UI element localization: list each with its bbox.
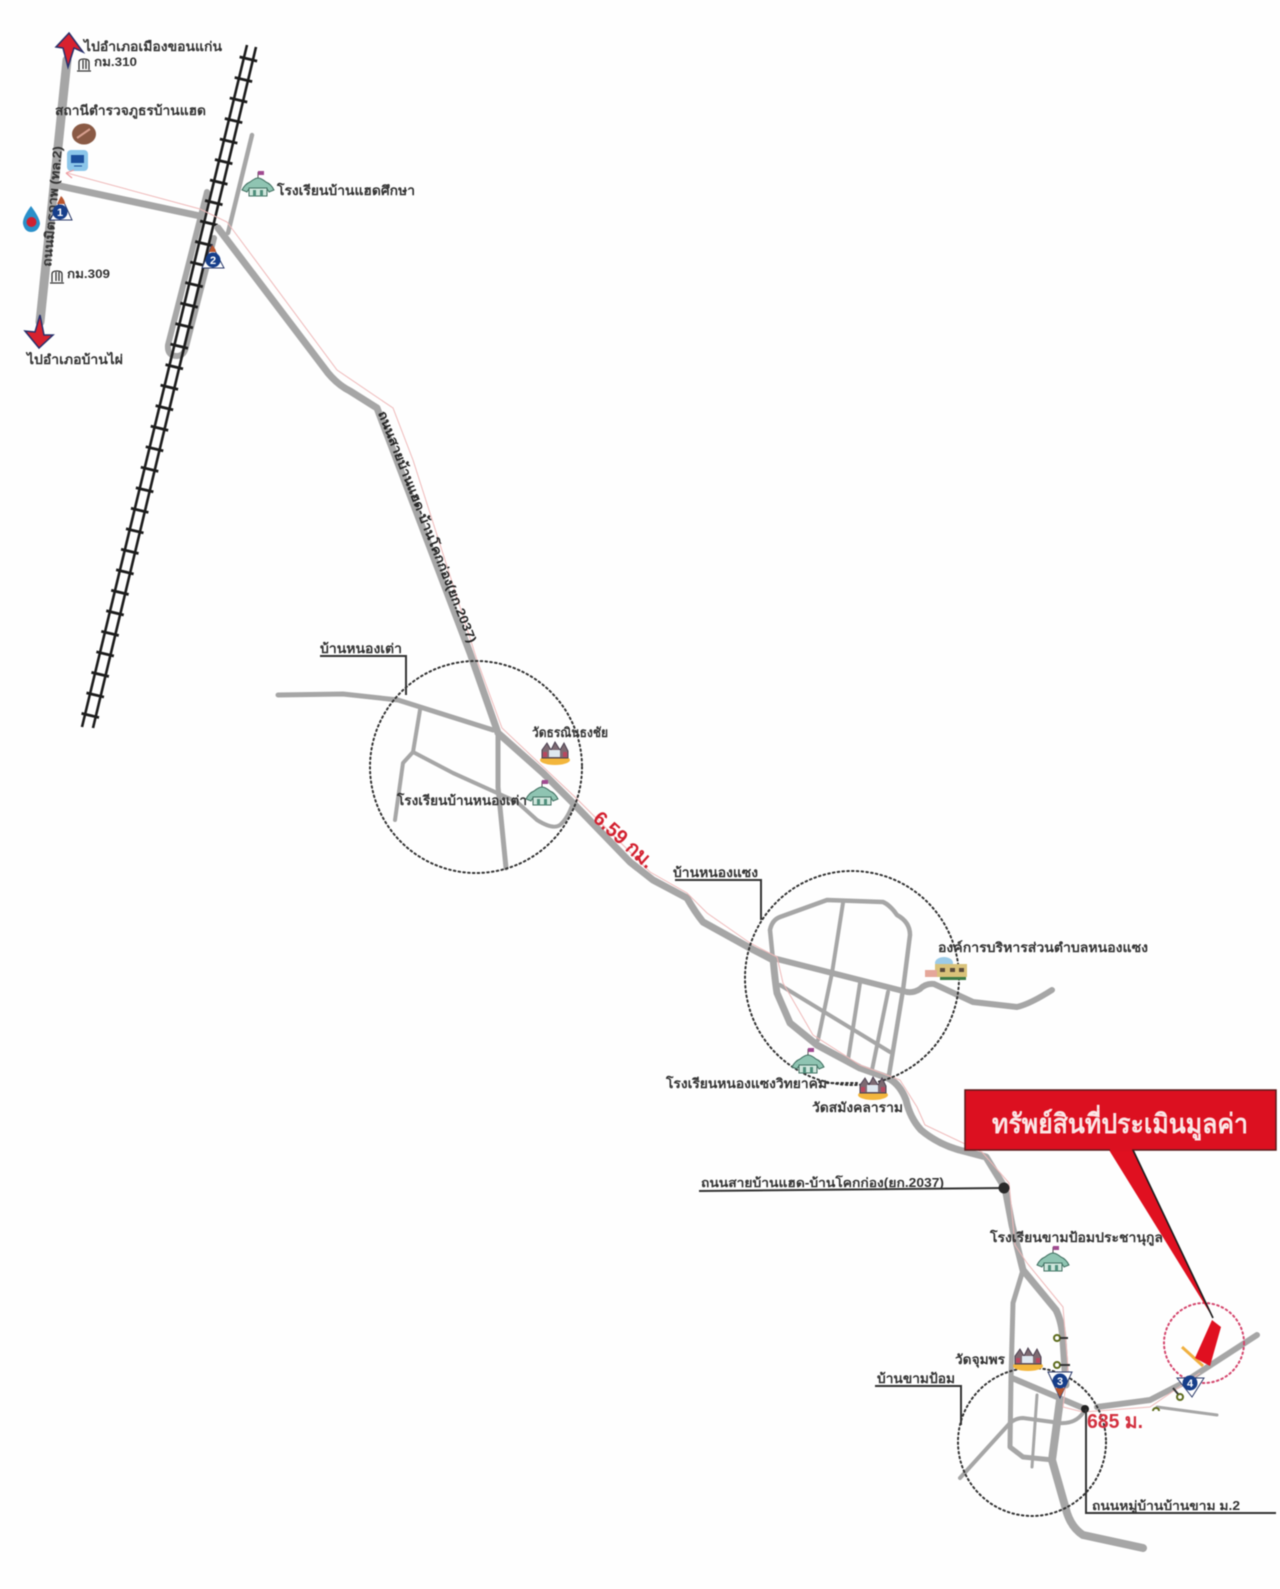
icon: SAO building xyxy=(925,957,967,980)
railway xyxy=(82,45,256,728)
label: Ban Nong Tao with leader: บ้านหนองเต่า xyxy=(320,641,402,656)
marker 3 xyxy=(1048,1372,1072,1398)
callout: assessed property: ทรัพย์สินที่ประเมินมูลค่า xyxy=(992,1104,1248,1141)
callout: assessed property xyxy=(965,1090,1276,1318)
marker 4: 4 xyxy=(1187,1378,1194,1390)
icon: temple xyxy=(540,742,570,765)
road: Nong Saeng to the east xyxy=(750,948,1052,1007)
marker 1: 1 xyxy=(57,207,63,219)
icon: school Ban Haet xyxy=(242,171,274,196)
label: main road name: ถนนสายบ้านแฮด-บ้านโคกก่อง(ยก.2037) xyxy=(375,409,480,645)
label: distance 6.59 km: 6.59 กม. xyxy=(589,807,658,873)
marker 4 xyxy=(1177,1376,1204,1397)
road grid: Ban Kham Pom xyxy=(960,1270,1257,1548)
marker 2 xyxy=(202,245,224,268)
main road สาย ยก.2037 xyxy=(218,228,773,960)
arrow: north to Khon Kaen xyxy=(56,33,83,67)
road grid: Ban Nong Tao xyxy=(278,694,573,868)
road network: frontage loop xyxy=(168,192,214,356)
marker 3: 3 xyxy=(1057,1376,1063,1388)
label: Ban Haet Suksa school: โรงเรียนบ้านแฮดศึกษา xyxy=(276,182,415,198)
property plot xyxy=(1182,1320,1221,1366)
label: Wat Samangkhalaram: วัดสมังคลาราม xyxy=(812,1100,903,1115)
circle: Ban Nong Saeng xyxy=(745,871,959,1085)
circle: Ban Kham Pom xyxy=(958,1368,1106,1516)
arrowhead: route end near sign xyxy=(66,170,74,178)
label: road name with leader xyxy=(699,1175,1010,1194)
arrow: south to Ban Phai xyxy=(25,315,53,348)
label: Ban Nong Saeng with leader xyxy=(673,865,761,920)
label: Wat Chumphon: วัดจุมพร xyxy=(955,1352,1005,1368)
label: distance 685 m: 685 ม. xyxy=(1087,1411,1143,1433)
property highlight circle xyxy=(1164,1303,1244,1383)
icon: temple Samangkhalaram xyxy=(858,1077,888,1100)
label: km 310: กม.310 xyxy=(94,55,137,69)
label: Ban Kham Pom with leader xyxy=(875,1371,961,1425)
icon: temple Chumphon xyxy=(1013,1348,1043,1371)
road grid: Ban Nong Saeng xyxy=(770,900,910,1075)
label: Nong Saeng Witthayakhom school: โรงเรียนหนองแซงวิทยาคม xyxy=(665,1075,827,1091)
label: village road with leader xyxy=(1081,1405,1276,1514)
label: Wat Thoranin Thongchai: วัดธรณินธงชัย xyxy=(532,725,608,740)
label: highway Mittraphap: ถนนมิตรภาพ (ทล.2) xyxy=(40,146,65,267)
label: km 309: กม.309 xyxy=(67,267,110,281)
icon: PTT gas station xyxy=(23,206,40,232)
icon: km shield 309 xyxy=(50,271,64,283)
circle: Ban Nong Tao xyxy=(370,661,582,873)
road: south through Nong Saeng to Kham Pom xyxy=(773,958,1066,1385)
icon: school Nong Tao xyxy=(526,780,558,805)
icon: school Kham Pom xyxy=(1037,1246,1069,1271)
icon: school Nong Saeng xyxy=(792,1048,824,1073)
label: Ban Nong Tao school: โรงเรียนบ้านหนองเต่า xyxy=(396,792,527,808)
route line xyxy=(67,173,1200,1412)
marker 1 xyxy=(50,196,72,220)
icon: km shield 310 xyxy=(77,59,91,71)
label: to Ban Phai: ไปอำเภอบ้านไผ่ xyxy=(25,351,123,367)
label: Ban Kham Pom with leader: บ้านขามป้อม xyxy=(877,1371,955,1386)
road network: highway and branch roads xyxy=(40,60,252,322)
label: Nong Saeng SAO: องค์การบริหารส่วนตำบลหนองแซง xyxy=(938,940,1148,955)
label: Ban Nong Tao with leader xyxy=(320,641,406,695)
label: to Khon Kaen: ไปอำเภอเมืองขอนแก่น xyxy=(82,38,222,54)
label: Ban Nong Saeng with leader: บ้านหนองแซง xyxy=(673,865,758,880)
label: road name with leader: ถนนสายบ้านแฮด-บ้านโคกก่อง(ยก.2037) xyxy=(701,1175,944,1190)
dotted link near school xyxy=(827,1082,857,1084)
label: village road with leader: ถนนหมู่บ้านบ้านขาม ม.2 xyxy=(1092,1499,1240,1514)
label: Kham Pom Pracha Nukul school: โรงเรียนขามป้อมประชานุกูล xyxy=(989,1229,1163,1246)
icon: police badge xyxy=(72,124,96,144)
icon: traffic marks on road xyxy=(1054,1335,1183,1411)
marker 2: 2 xyxy=(210,255,216,267)
label: police station: สถานีตำรวจภูธรบ้านแฮด xyxy=(55,103,206,119)
icon: blue sign xyxy=(67,150,88,171)
